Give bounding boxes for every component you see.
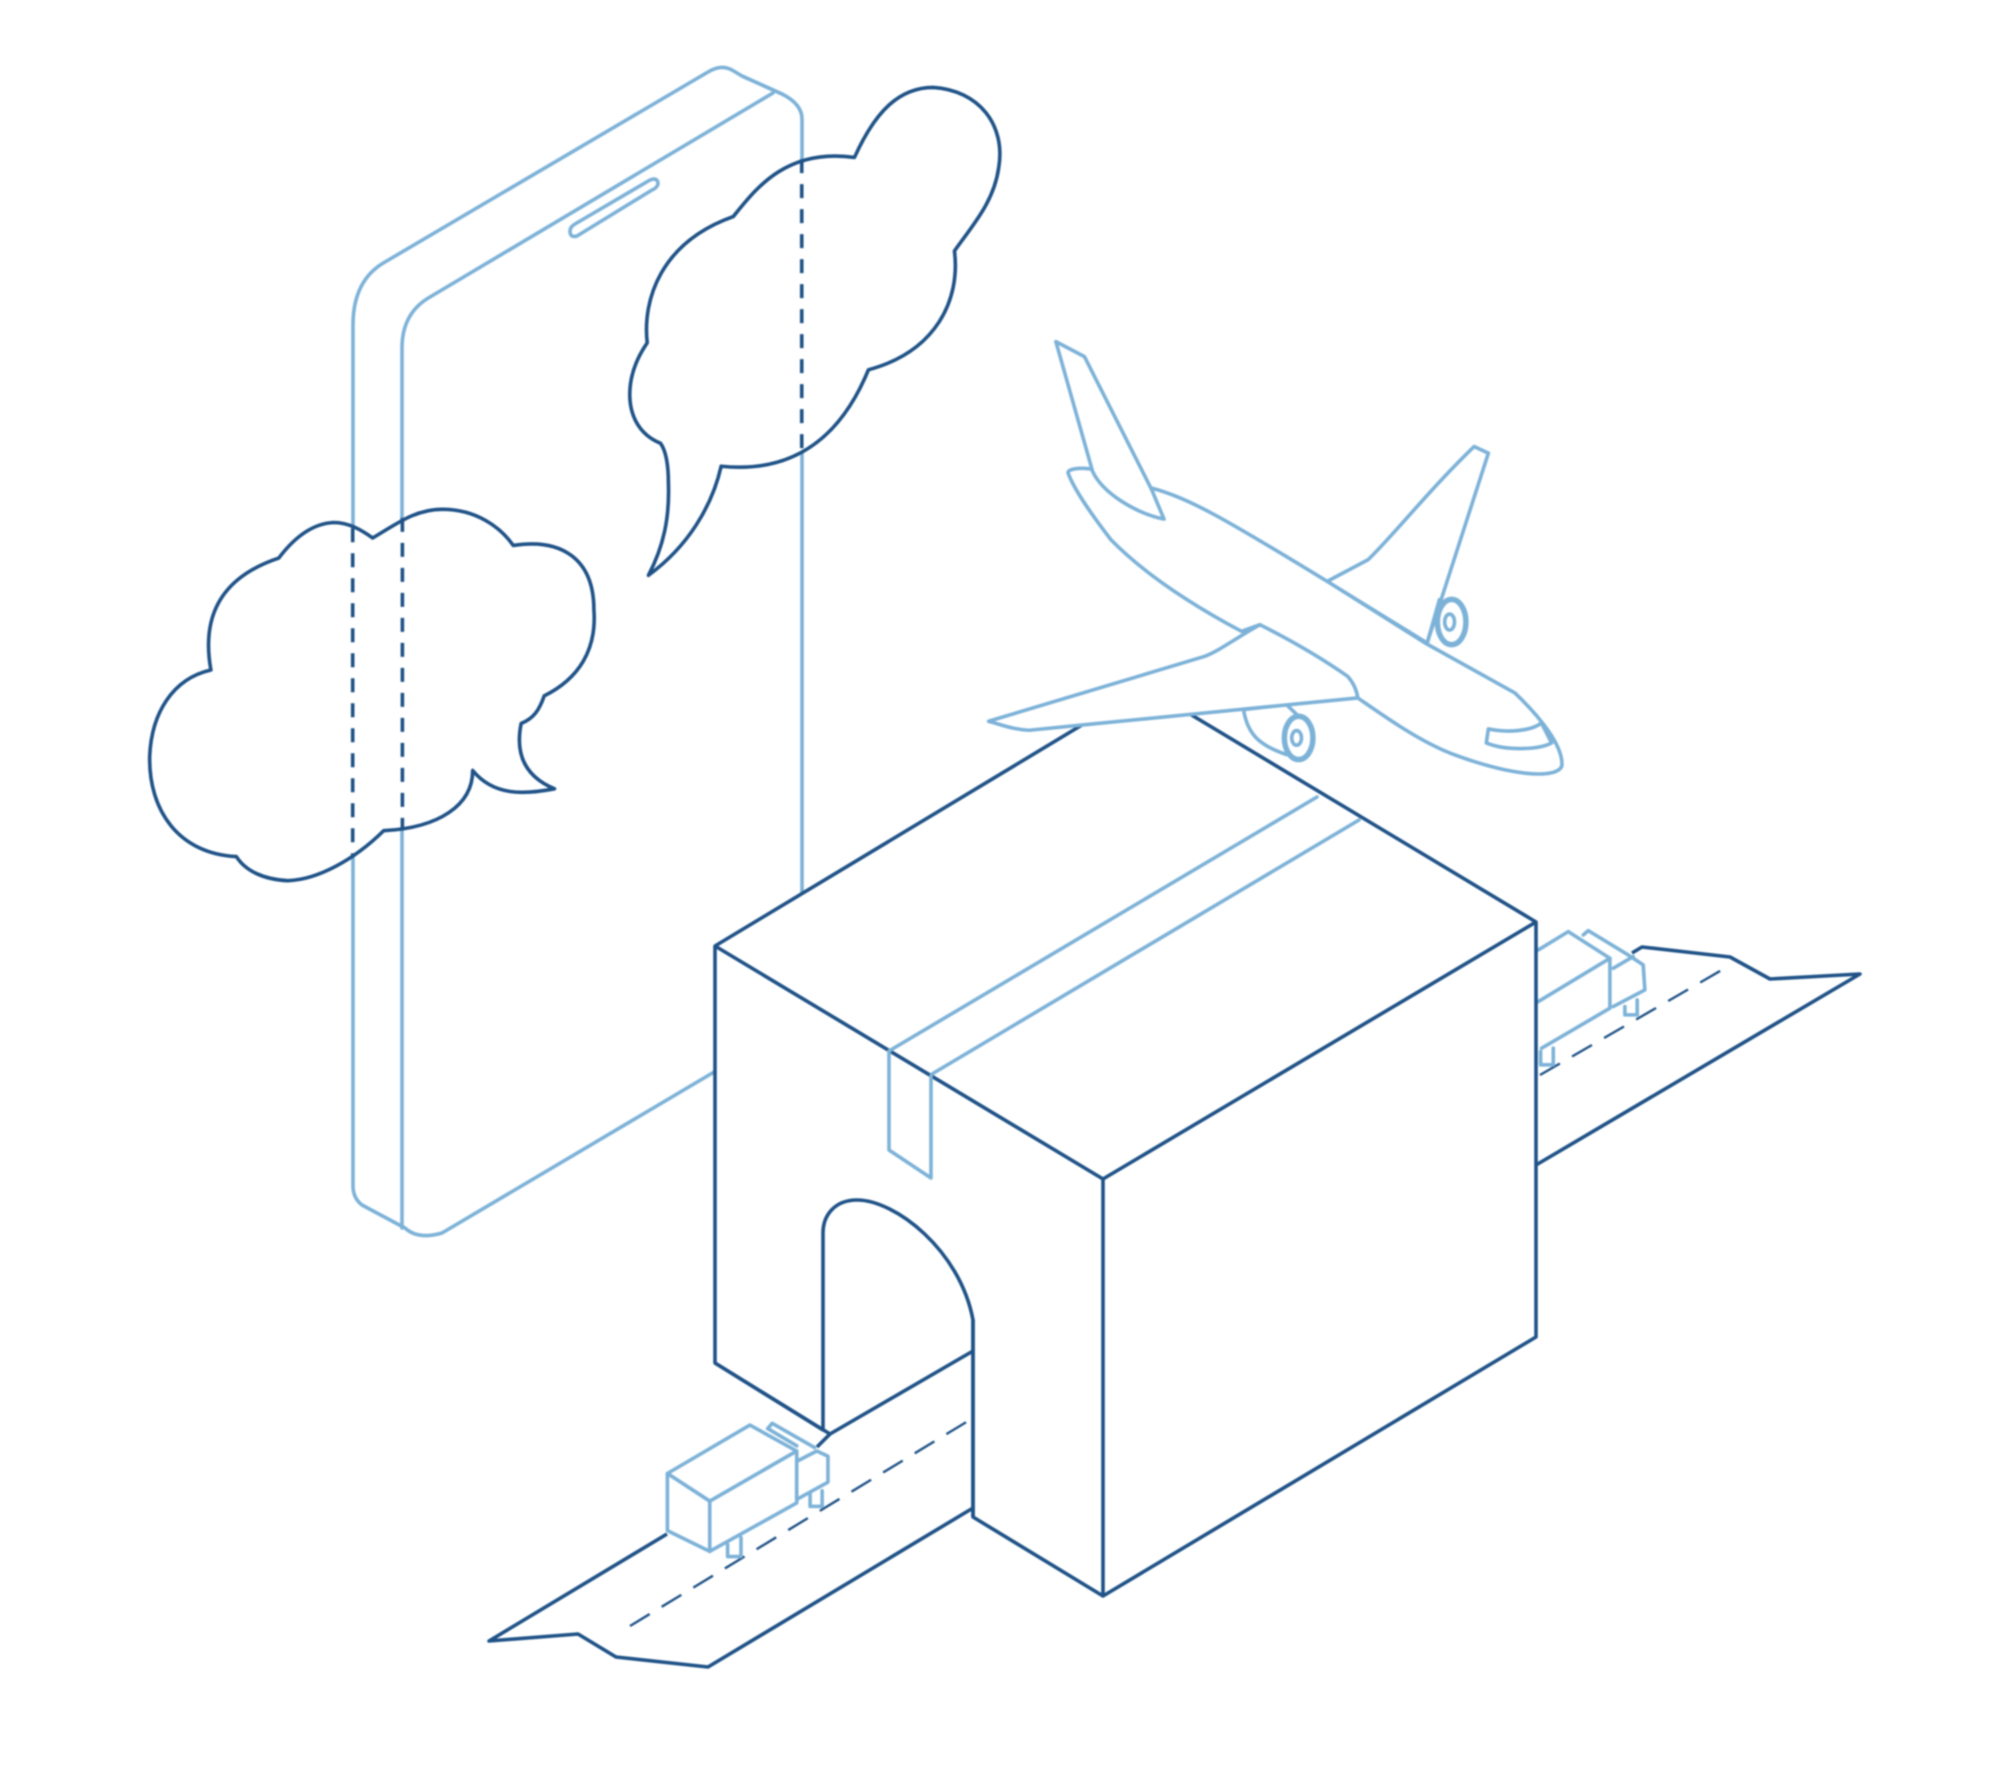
far wing (1327, 447, 1488, 643)
truck: left, in front of tunnel (667, 1423, 828, 1557)
speech cloud: upper right (630, 87, 1000, 575)
parcel box with arched tunnel (715, 687, 1536, 1596)
road: right side (1536, 947, 1860, 1165)
truck: right, emerging behind parcel (1538, 931, 1645, 1065)
far engine (1427, 599, 1466, 645)
icon: smartphone outline (353, 67, 802, 1236)
speech cloud: lower left (150, 509, 594, 881)
tail fin (1056, 342, 1164, 519)
cockpit window (1486, 723, 1552, 749)
road: left side through tunnel (489, 1418, 973, 1667)
near engine (1244, 705, 1313, 760)
near wing (989, 625, 1358, 730)
parcel tape (889, 797, 1359, 1178)
icon: airplane (989, 342, 1562, 774)
fuselage (1068, 468, 1562, 774)
